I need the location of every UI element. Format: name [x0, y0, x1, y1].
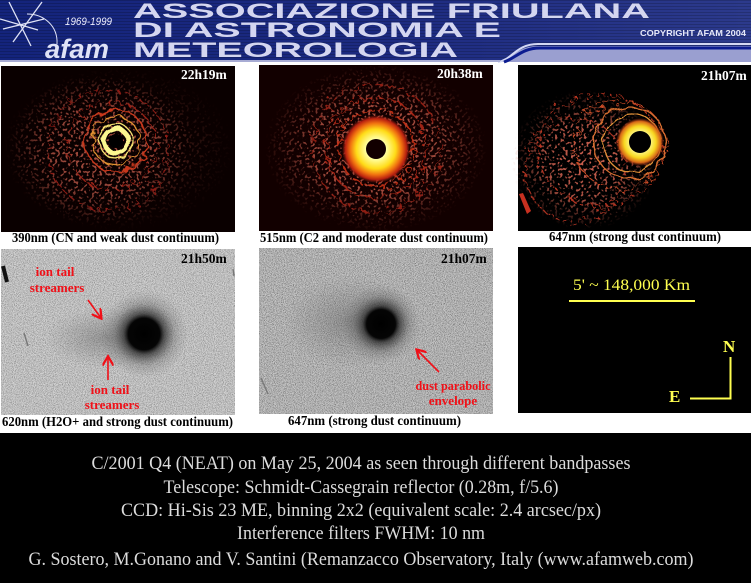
caption: 515nm: 515nm (C2 and moderate dust continuum)	[260, 230, 488, 245]
annotation: ion tail streamers lower	[85, 357, 139, 412]
panel: 515nm image	[259, 64, 493, 232]
panel: description: Interference filters FWHM: 10 nm	[237, 524, 486, 544]
time label: 22h19m	[181, 67, 228, 82]
panel: 620nm image	[1, 249, 235, 415]
header title	[133, 0, 650, 62]
caption: 647nm lower: 647nm (strong dust continuum)	[288, 413, 461, 428]
annotation: dust parabolic envelope: dust parabolic	[416, 378, 491, 393]
panel: description: G. Sostero, M.Gonano and V. Santini (Remanzacco Observatory, Italy (www.afamweb.com)	[28, 550, 694, 570]
header title: METEOROLOGIA	[133, 39, 458, 62]
time label: 21h07m	[701, 68, 748, 83]
panel: 647nm image	[511, 65, 751, 231]
scale label: 5' ~ 148,000 Km	[573, 277, 691, 294]
annotation: ion tail streamers upper: streamers	[30, 280, 84, 295]
swoosh	[498, 46, 751, 62]
panel: description	[0, 433, 751, 583]
logo name: afam	[45, 34, 109, 64]
scale bar	[569, 300, 695, 302]
header title: DI ASTRONOMIA E	[133, 19, 501, 42]
compass: E	[669, 387, 680, 406]
annotation: dust parabolic envelope	[416, 350, 491, 408]
panel: description: C/2001 Q4 (NEAT) on May 25, 2004 as seen through different bandpasses	[92, 454, 630, 474]
annotation: ion tail streamers upper: ion tail	[36, 264, 75, 279]
caption: 647nm top: 647nm (strong dust continuum)	[549, 229, 721, 244]
annotation: ion tail streamers upper	[30, 264, 101, 318]
time label: 21h50m	[181, 251, 228, 266]
panel: description: CCD: Hi-Sis 23 ME, binning 2x2 (equivalent scale: 2.4 arcsec/px)	[121, 501, 601, 521]
compass: N	[723, 337, 736, 356]
caption: 620nm: 620nm (H2O+ and strong dust continuum)	[2, 414, 233, 429]
annotation: ion tail streamers lower: streamers	[85, 397, 139, 412]
copyright: COPYRIGHT AFAM 2004	[640, 28, 746, 38]
header banner	[0, 0, 751, 64]
time label: 21h07m	[441, 251, 488, 266]
panel: scale and orientation	[518, 247, 751, 413]
header title: ASSOCIAZIONE FRIULANA	[133, 0, 650, 23]
annotation: dust parabolic envelope: envelope	[429, 393, 477, 408]
time label: 20h38m	[437, 66, 484, 81]
caption: 390nm: 390nm (CN and weak dust continuum)	[12, 230, 219, 245]
panel: 647nm grayscale image	[259, 248, 493, 414]
panel: description: Telescope: Schmidt-Cassegrain reflector (0.28m, f/5.6)	[164, 478, 558, 498]
panel: 390nm image	[1, 66, 235, 232]
logo years: 1969-1999	[65, 16, 112, 28]
annotation: ion tail streamers lower: ion tail	[91, 382, 130, 397]
compass	[669, 337, 736, 406]
icon: logo star	[0, 2, 57, 46]
